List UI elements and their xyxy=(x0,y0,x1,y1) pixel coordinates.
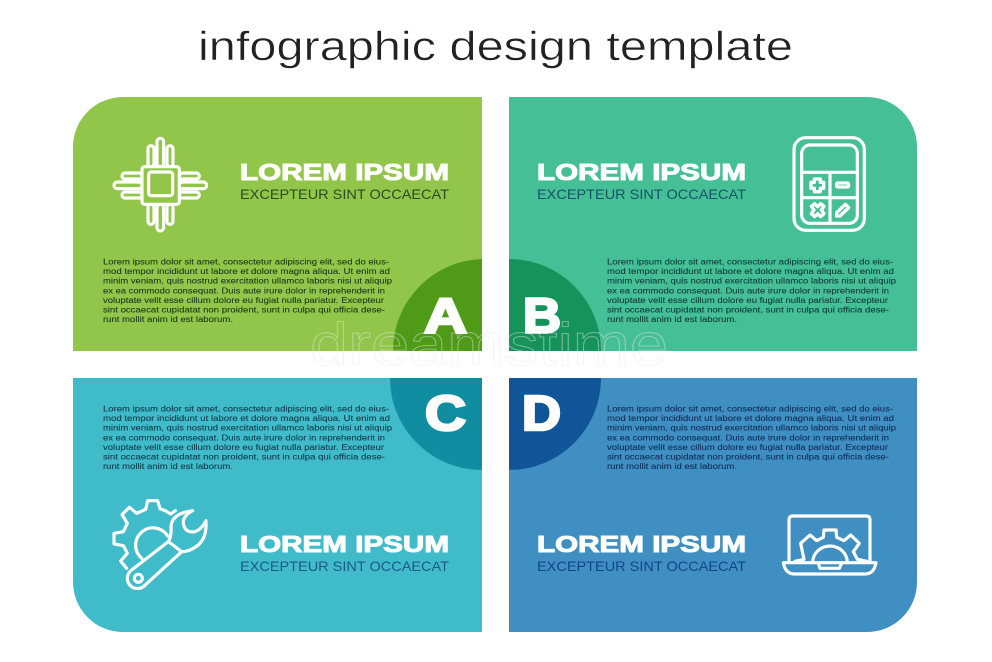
panel: C xyxy=(73,378,482,632)
panel A heading: LOREM IPSUM xyxy=(240,159,449,185)
icon: laptop with gear xyxy=(783,516,876,574)
panel C body text: minim veniam, quis nostrud exercitation ullamco laboris nisi ut aliquip xyxy=(103,423,392,433)
panel A body text: voluptate velit esse cillum dolore eu fugiat nulla pariatur. Excepteur xyxy=(103,295,384,305)
panel D body text: Lorem ipsum dolor sit amet, consectetur adipiscing elit, sed do eius- xyxy=(607,404,893,414)
panel C body text: mod tempor incididunt ut labore et dolore magna aliqua. Ut enim ad xyxy=(103,413,390,423)
panel A body text: ex ea commodo consequat. Duis aute irure dolor in reprehenderit in xyxy=(103,285,385,295)
watermark: dreamstime xyxy=(310,311,668,378)
panel A letter badge xyxy=(393,259,482,351)
letter C: C xyxy=(425,387,466,441)
letter A: A xyxy=(424,290,467,344)
panel C background xyxy=(73,378,482,632)
panel C body text xyxy=(103,404,392,471)
panel A body text: Lorem ipsum dolor sit amet, consectetur adipiscing elit, sed do eius- xyxy=(103,256,389,266)
letter B: B xyxy=(523,290,561,344)
panel D body text xyxy=(607,404,896,471)
panel A body text xyxy=(103,256,392,324)
panel C subheading: EXCEPTEUR SINT OCCAECAT xyxy=(240,558,449,574)
panel B body text: ex ea commodo consequat. Duis aute irure dolor in reprehenderit in xyxy=(607,285,889,295)
panel B letter badge xyxy=(509,259,601,351)
panel C body text: sint occaecat cupidatat non proident, sunt in culpa qui officia dese- xyxy=(103,452,385,462)
panel D heading: LOREM IPSUM xyxy=(537,531,746,557)
panel C body text: Lorem ipsum dolor sit amet, consectetur adipiscing elit, sed do eius- xyxy=(103,404,389,414)
panel D body text: ex ea commodo consequat. Duis aute irure dolor in reprehenderit in xyxy=(607,432,889,442)
panel B body text: minim veniam, quis nostrud exercitation ullamco laboris nisi ut aliquip xyxy=(607,276,896,286)
panel A body text: minim veniam, quis nostrud exercitation ullamco laboris nisi ut aliquip xyxy=(103,276,392,286)
panel A body text: sint occaecat cupidatat non proident, sunt in culpa qui officia dese- xyxy=(103,304,385,314)
panel A subheading: EXCEPTEUR SINT OCCAECAT xyxy=(240,186,449,202)
panel C letter badge xyxy=(390,378,482,470)
panel: D xyxy=(509,378,917,632)
panel C heading: LOREM IPSUM xyxy=(240,531,449,557)
panel D body text: sint occaecat cupidatat non proident, sunt in culpa qui officia dese- xyxy=(607,452,889,462)
title: infographic design template xyxy=(198,23,793,69)
panel B heading: LOREM IPSUM xyxy=(537,159,746,185)
panel D body text: voluptate velit esse cillum dolore eu fugiat nulla pariatur. Excepteur xyxy=(607,442,888,452)
panel B body text: mod tempor incididunt ut labore et dolore magna aliqua. Ut enim ad xyxy=(607,266,894,276)
icon: gear and wrench xyxy=(114,501,206,588)
panel B body text: sint occaecat cupidatat non proident, sunt in culpa qui officia dese- xyxy=(607,304,889,314)
panel A body text: mod tempor incididunt ut labore et dolore magna aliqua. Ut enim ad xyxy=(103,266,390,276)
panel C body text: ex ea commodo consequat. Duis aute irure dolor in reprehenderit in xyxy=(103,432,385,442)
panel: A xyxy=(73,97,482,351)
icon: calculator xyxy=(794,138,864,230)
letter D: D xyxy=(522,387,561,441)
panel: B xyxy=(509,97,917,351)
panel D body text: mod tempor incididunt ut labore et dolore magna aliqua. Ut enim ad xyxy=(607,413,894,423)
panel D body text: runt mollit anim id est laborum. xyxy=(607,461,737,471)
panel B body text xyxy=(607,256,896,324)
panel D subheading: EXCEPTEUR SINT OCCAECAT xyxy=(537,558,746,574)
icon: microchip xyxy=(114,138,207,231)
panel A background xyxy=(73,97,482,351)
panel C body text: runt mollit anim id est laborum. xyxy=(103,461,233,471)
panel C body text: voluptate velit esse cillum dolore eu fugiat nulla pariatur. Excepteur xyxy=(103,442,384,452)
panel B body text: voluptate velit esse cillum dolore eu fugiat nulla pariatur. Excepteur xyxy=(607,295,888,305)
panel D body text: minim veniam, quis nostrud exercitation ullamco laboris nisi ut aliquip xyxy=(607,423,896,433)
panel D letter badge xyxy=(509,378,601,470)
panel B background xyxy=(509,97,917,351)
panel D background xyxy=(509,378,917,632)
panel B subheading: EXCEPTEUR SINT OCCAECAT xyxy=(537,186,746,202)
panel B body text: Lorem ipsum dolor sit amet, consectetur adipiscing elit, sed do eius- xyxy=(607,256,893,266)
panel A body text: runt mollit anim id est laborum. xyxy=(103,314,233,324)
panel B body text: runt mollit anim id est laborum. xyxy=(607,314,737,324)
